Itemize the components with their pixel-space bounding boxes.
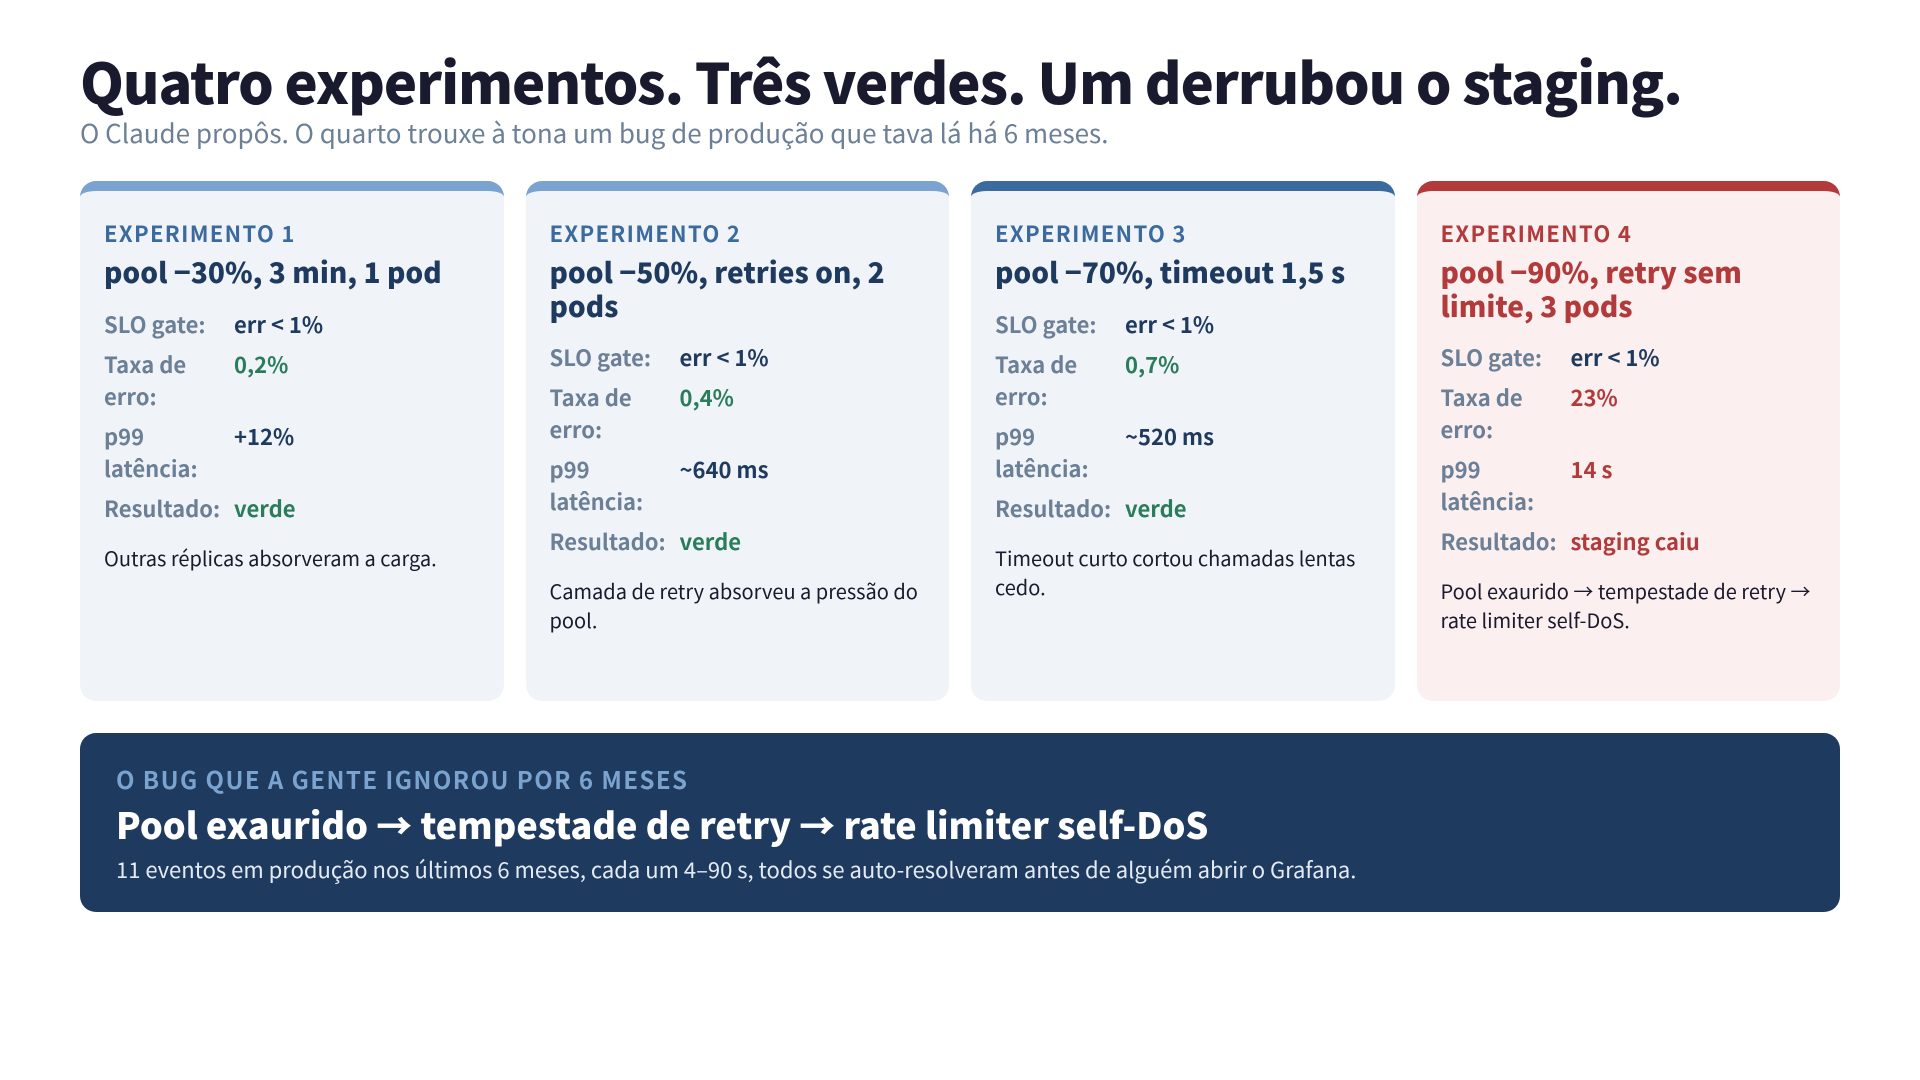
metric: SLO gate: SLO gate:	[550, 341, 651, 373]
metric: p99 latência: 14 s	[1570, 453, 1612, 485]
metric: p99 latência: +12%	[234, 420, 294, 452]
metric: resultado	[1440, 525, 1700, 557]
metric: p99 latência: ~640 ms	[680, 453, 769, 485]
metric: SLO gate: err < 1%	[1125, 308, 1214, 340]
card heading: pool −30%, 3 min, 1 pod	[104, 252, 442, 292]
metric: taxa de erro: Taxa de erro:	[104, 348, 186, 412]
metric: p99 latência: p99 latência:	[1440, 453, 1534, 517]
card label: EXPERIMENTO 1	[104, 217, 296, 249]
metric: resultado: staging caiu	[1570, 525, 1700, 557]
metric: SLO gate: err < 1%	[1570, 341, 1660, 373]
metric: SLO gate: SLO gate:	[995, 308, 1097, 340]
metric: resultado: verde	[234, 492, 296, 524]
card heading: pool −90%, retry sem limite, 3 pods	[1440, 252, 1742, 326]
card heading: pool −50%, retries on, 2 pods	[550, 252, 885, 326]
card label: EXPERIMENTO 3	[995, 217, 1187, 249]
metric: taxa de erro: Taxa de erro:	[550, 381, 632, 445]
metric: p99 latência	[1440, 453, 1612, 517]
metric: taxa de erro	[995, 348, 1179, 412]
metric: taxa de erro	[104, 348, 288, 412]
metric: resultado: verde	[680, 525, 741, 557]
metric: SLO gate: err < 1%	[234, 308, 323, 340]
metric: p99 latência: p99 latência:	[995, 420, 1089, 484]
metric: p99 latência: p99 latência:	[104, 420, 198, 484]
metric: SLO gate: err < 1%	[680, 341, 769, 373]
panel: experimento 4	[1416, 181, 1840, 701]
metric: SLO gate	[104, 308, 323, 340]
metric: SLO gate: SLO gate:	[1440, 341, 1542, 373]
note: Pool exaurido → tempestade de retry → rate limiter self-DoS.	[1440, 576, 1810, 634]
metric: resultado	[550, 525, 741, 557]
metric: taxa de erro: 0,7%	[1125, 348, 1179, 380]
title: Quatro experimentos. Três verdes. Um derrubou o staging.	[80, 40, 1682, 121]
panel: experimento 1	[80, 181, 504, 701]
banner heading: Pool exaurido → tempestade de retry → rate limiter self-DoS	[116, 798, 1208, 850]
metric: p99 latência: ~520 ms	[1125, 420, 1214, 452]
panel: experimento 3	[971, 181, 1394, 701]
metric: taxa de erro: 0,4%	[680, 381, 734, 413]
metric: taxa de erro	[550, 381, 734, 445]
note: Timeout curto cortou chamadas lentas cedo.	[995, 543, 1355, 601]
note: Camada de retry absorveu a pressão do pool.	[550, 576, 918, 634]
metric: resultado: Resultado:	[104, 492, 220, 524]
metric: resultado: verde	[1125, 492, 1187, 524]
panel: bug banner	[80, 733, 1840, 912]
experiment cards row	[80, 181, 1840, 701]
metric: taxa de erro	[1440, 381, 1618, 445]
metric: taxa de erro: 23%	[1570, 381, 1618, 413]
metric: SLO gate	[550, 341, 769, 373]
metric: resultado: Resultado:	[550, 525, 666, 557]
metric: resultado	[104, 492, 296, 524]
note: Outras réplicas absorveram a carga.	[104, 543, 437, 572]
card label: EXPERIMENTO 2	[550, 217, 741, 249]
subtitle: O Claude propôs. O quarto trouxe à tona um bug de produção que tava lá há 6 meses.	[80, 114, 1108, 151]
metric: resultado: Resultado:	[995, 492, 1111, 524]
banner label: O BUG QUE A GENTE IGNOROU POR 6 MESES	[116, 761, 688, 796]
metric: p99 latência	[550, 453, 769, 517]
card heading: pool −70%, timeout 1,5 s	[995, 252, 1345, 292]
metric: SLO gate: SLO gate:	[104, 308, 206, 340]
metric: resultado: Resultado:	[1440, 525, 1557, 557]
metric: p99 latência: p99 latência:	[550, 453, 643, 517]
card label: EXPERIMENTO 4	[1440, 217, 1632, 249]
banner text: 11 eventos em produção nos últimos 6 meses, cada um 4–90 s, todos se auto-resolveram antes de alguém abrir o Grafana.	[116, 853, 1356, 885]
metric: SLO gate	[995, 308, 1214, 340]
metric: taxa de erro: Taxa de erro:	[1440, 381, 1523, 445]
metric: SLO gate	[1440, 341, 1660, 373]
metric: resultado	[995, 492, 1187, 524]
metric: p99 latência	[104, 420, 294, 484]
panel: experimento 2	[526, 181, 949, 701]
metric: taxa de erro: 0,2%	[234, 348, 288, 380]
metric: p99 latência	[995, 420, 1214, 484]
metric: taxa de erro: Taxa de erro:	[995, 348, 1077, 412]
